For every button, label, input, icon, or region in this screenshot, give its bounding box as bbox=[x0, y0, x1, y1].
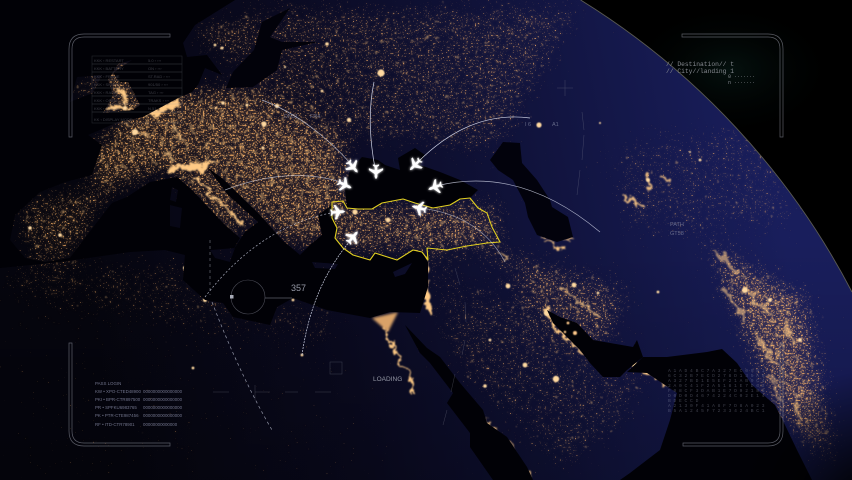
HUD data table top left: KKK ‹ SIGNAL bbox=[94, 82, 121, 87]
route from east bbox=[418, 117, 530, 162]
HUD data table top left: 901/50 › ››› bbox=[148, 82, 168, 87]
HUD data table top left: ON › ››› bbox=[148, 66, 162, 71]
bright urban areas bbox=[110, 88, 800, 478]
HUD login text bottom left: RF • ITD-CTR78901 bbox=[95, 422, 135, 427]
plane 2 bbox=[369, 164, 383, 179]
map labels: GT58 bbox=[670, 231, 684, 237]
plane 6 bbox=[330, 204, 346, 220]
Arabian Sea bbox=[620, 349, 812, 480]
route from Moscow bbox=[370, 82, 375, 168]
HUD frame: bottom left bracket bbox=[69, 343, 170, 446]
HUD data table top left: KK ‹ DISPLAY MODE bbox=[94, 117, 133, 122]
HUD login text bottom left: 0000000000000000 bbox=[143, 413, 183, 418]
HUD destination readout top right: // City//landing 1 bbox=[666, 68, 734, 75]
HUD data matrix bottom right: F 0 8 C F 3 D A B 1 E 7 D 9 2 1 8 6 bbox=[668, 388, 765, 394]
plane 4 bbox=[426, 178, 444, 196]
HUD data table top left: ST.RAD › ››› bbox=[148, 74, 170, 79]
HUD data table top left: KKK ‹ OPEN bbox=[94, 98, 117, 103]
atmosphere rim bbox=[581, 0, 852, 292]
HUD data matrix bottom right: B D E C C D bbox=[668, 398, 699, 404]
route from north-west bbox=[262, 100, 352, 165]
HUD login text bottom left: PKI • BPR-CTR897500 bbox=[95, 397, 141, 402]
HUD data matrix bottom right bbox=[668, 368, 765, 414]
HUD data matrix bottom right: B 5 A 1 2 4 5 F 7 2 3 3 4 2 4 B C 1 bbox=[668, 408, 765, 414]
map labels: I 6 bbox=[525, 122, 531, 128]
route from west bbox=[225, 175, 344, 190]
HUD login text bottom left bbox=[95, 381, 183, 427]
Black Sea bbox=[345, 148, 478, 209]
HUD login text bottom left: KW • XPO-CTED48900 bbox=[95, 389, 142, 394]
HUD data matrix bottom right: D 0 D 0 D 4 6 7 4 2 2 4 C 0 2 E 1 4 bbox=[668, 393, 765, 399]
HUD data table top left: KKK ‹ RESTART bbox=[94, 58, 124, 63]
aeroplanes bbox=[330, 155, 444, 247]
map labels: A1 bbox=[552, 122, 559, 128]
HUD data matrix bottom right: A 1 A D 4 B C 7 A 3 2 7 E C 0 9 8 1 bbox=[668, 368, 765, 374]
map labels bbox=[284, 114, 684, 237]
HUD data table top left: KKK ‹ BATTERY bbox=[94, 66, 124, 71]
map labels: FR4 bbox=[310, 114, 320, 120]
HUD data table top left: KKK ‹ CLOSE bbox=[94, 106, 119, 111]
flight route arcs bbox=[205, 82, 600, 430]
radar ring and speed readout: 357 bbox=[291, 283, 306, 293]
route from Italy bbox=[209, 240, 211, 295]
HUD destination readout top right: 0 ······· bbox=[728, 74, 755, 80]
HUD login text bottom left: 0000000000000000 bbox=[143, 389, 183, 394]
Persian Gulf bbox=[547, 310, 643, 377]
HUD login text bottom left: PASS LOGIN bbox=[95, 381, 121, 386]
Turkey border outline bbox=[332, 198, 500, 260]
route to south bbox=[212, 302, 272, 430]
plane 3 bbox=[405, 155, 425, 175]
HUD data matrix bottom right: 6 C 3 2 B 7 E C D 2 7 8 D 1 3 5 A 0 bbox=[668, 373, 765, 379]
loading label: LOADING bbox=[373, 376, 402, 383]
plane 1 bbox=[343, 157, 363, 177]
route from Caucasus bbox=[436, 181, 600, 232]
HUD destination readout top right: n ······· bbox=[728, 80, 755, 86]
radar ring and speed readout bbox=[230, 280, 306, 314]
night-side terminator bbox=[781, 386, 852, 480]
HUD destination readout top right bbox=[666, 61, 755, 86]
HUD data table top left: TAG › ››› bbox=[148, 90, 164, 95]
HUD data matrix bottom right: A 3 2 7 B D 1 E 5 E F 2 1 A B 9 C 4 bbox=[668, 378, 765, 384]
plane 7 bbox=[410, 199, 428, 217]
map labels: DN51 bbox=[284, 114, 298, 120]
nebula glow bbox=[620, 0, 840, 140]
Baltic Sea bbox=[226, 8, 318, 88]
route from Egypt bbox=[302, 240, 351, 355]
HUD data matrix bottom right: A 2 1 3 0 F 4 1 A 8 F 7 D 8 A 0 2 3 bbox=[668, 403, 765, 409]
HUD login text bottom left: PR • SPFKU6983765 bbox=[95, 405, 137, 410]
plane 5 bbox=[335, 175, 354, 194]
Caspian Sea bbox=[490, 142, 573, 242]
HUD login text bottom left: 00000000000000 bbox=[143, 422, 178, 427]
map labels: PATH bbox=[670, 222, 684, 228]
HUD data table top left: KKK ‹ RADIO bbox=[94, 90, 118, 95]
HUD data table top left: N.51 bbox=[148, 106, 157, 111]
HUD frame: top right bracket bbox=[682, 34, 783, 137]
HUD data table top left: 5.0 › ››› bbox=[148, 58, 162, 63]
HUD login text bottom left: 0000000000000000 bbox=[143, 397, 183, 402]
HUD data table top left: KKK ‹ FRAME bbox=[94, 74, 120, 79]
plane 8 bbox=[343, 227, 363, 247]
HUD data matrix bottom right: 2 A 0 C 4 1 F 2 A 5 1 8 1 E 7 D 6 3 bbox=[668, 383, 765, 389]
oceans and seas bbox=[0, 0, 428, 325]
targeting marks bbox=[213, 80, 584, 425]
route to Iraq bbox=[420, 208, 505, 262]
gas flare lights in the Gulf bbox=[564, 322, 577, 335]
southern shading bbox=[426, 341, 852, 480]
Red Sea bbox=[405, 325, 533, 480]
large city glows bbox=[28, 42, 802, 388]
HUD frame: top left bracket bbox=[69, 34, 170, 137]
HUD login text bottom left: 0000000000000000 bbox=[143, 405, 183, 410]
Nile delta bbox=[372, 312, 398, 332]
HUD frame: bottom right bracket bbox=[683, 343, 783, 446]
HUD destination readout top right: // Destination// t bbox=[666, 61, 734, 68]
route from Libya bbox=[205, 212, 336, 297]
HUD login text bottom left: PK • PTR-CTE987456 bbox=[95, 413, 139, 418]
HUD data table top left: TRAKS › ››› bbox=[148, 98, 170, 103]
HUD data table top left bbox=[92, 56, 182, 123]
